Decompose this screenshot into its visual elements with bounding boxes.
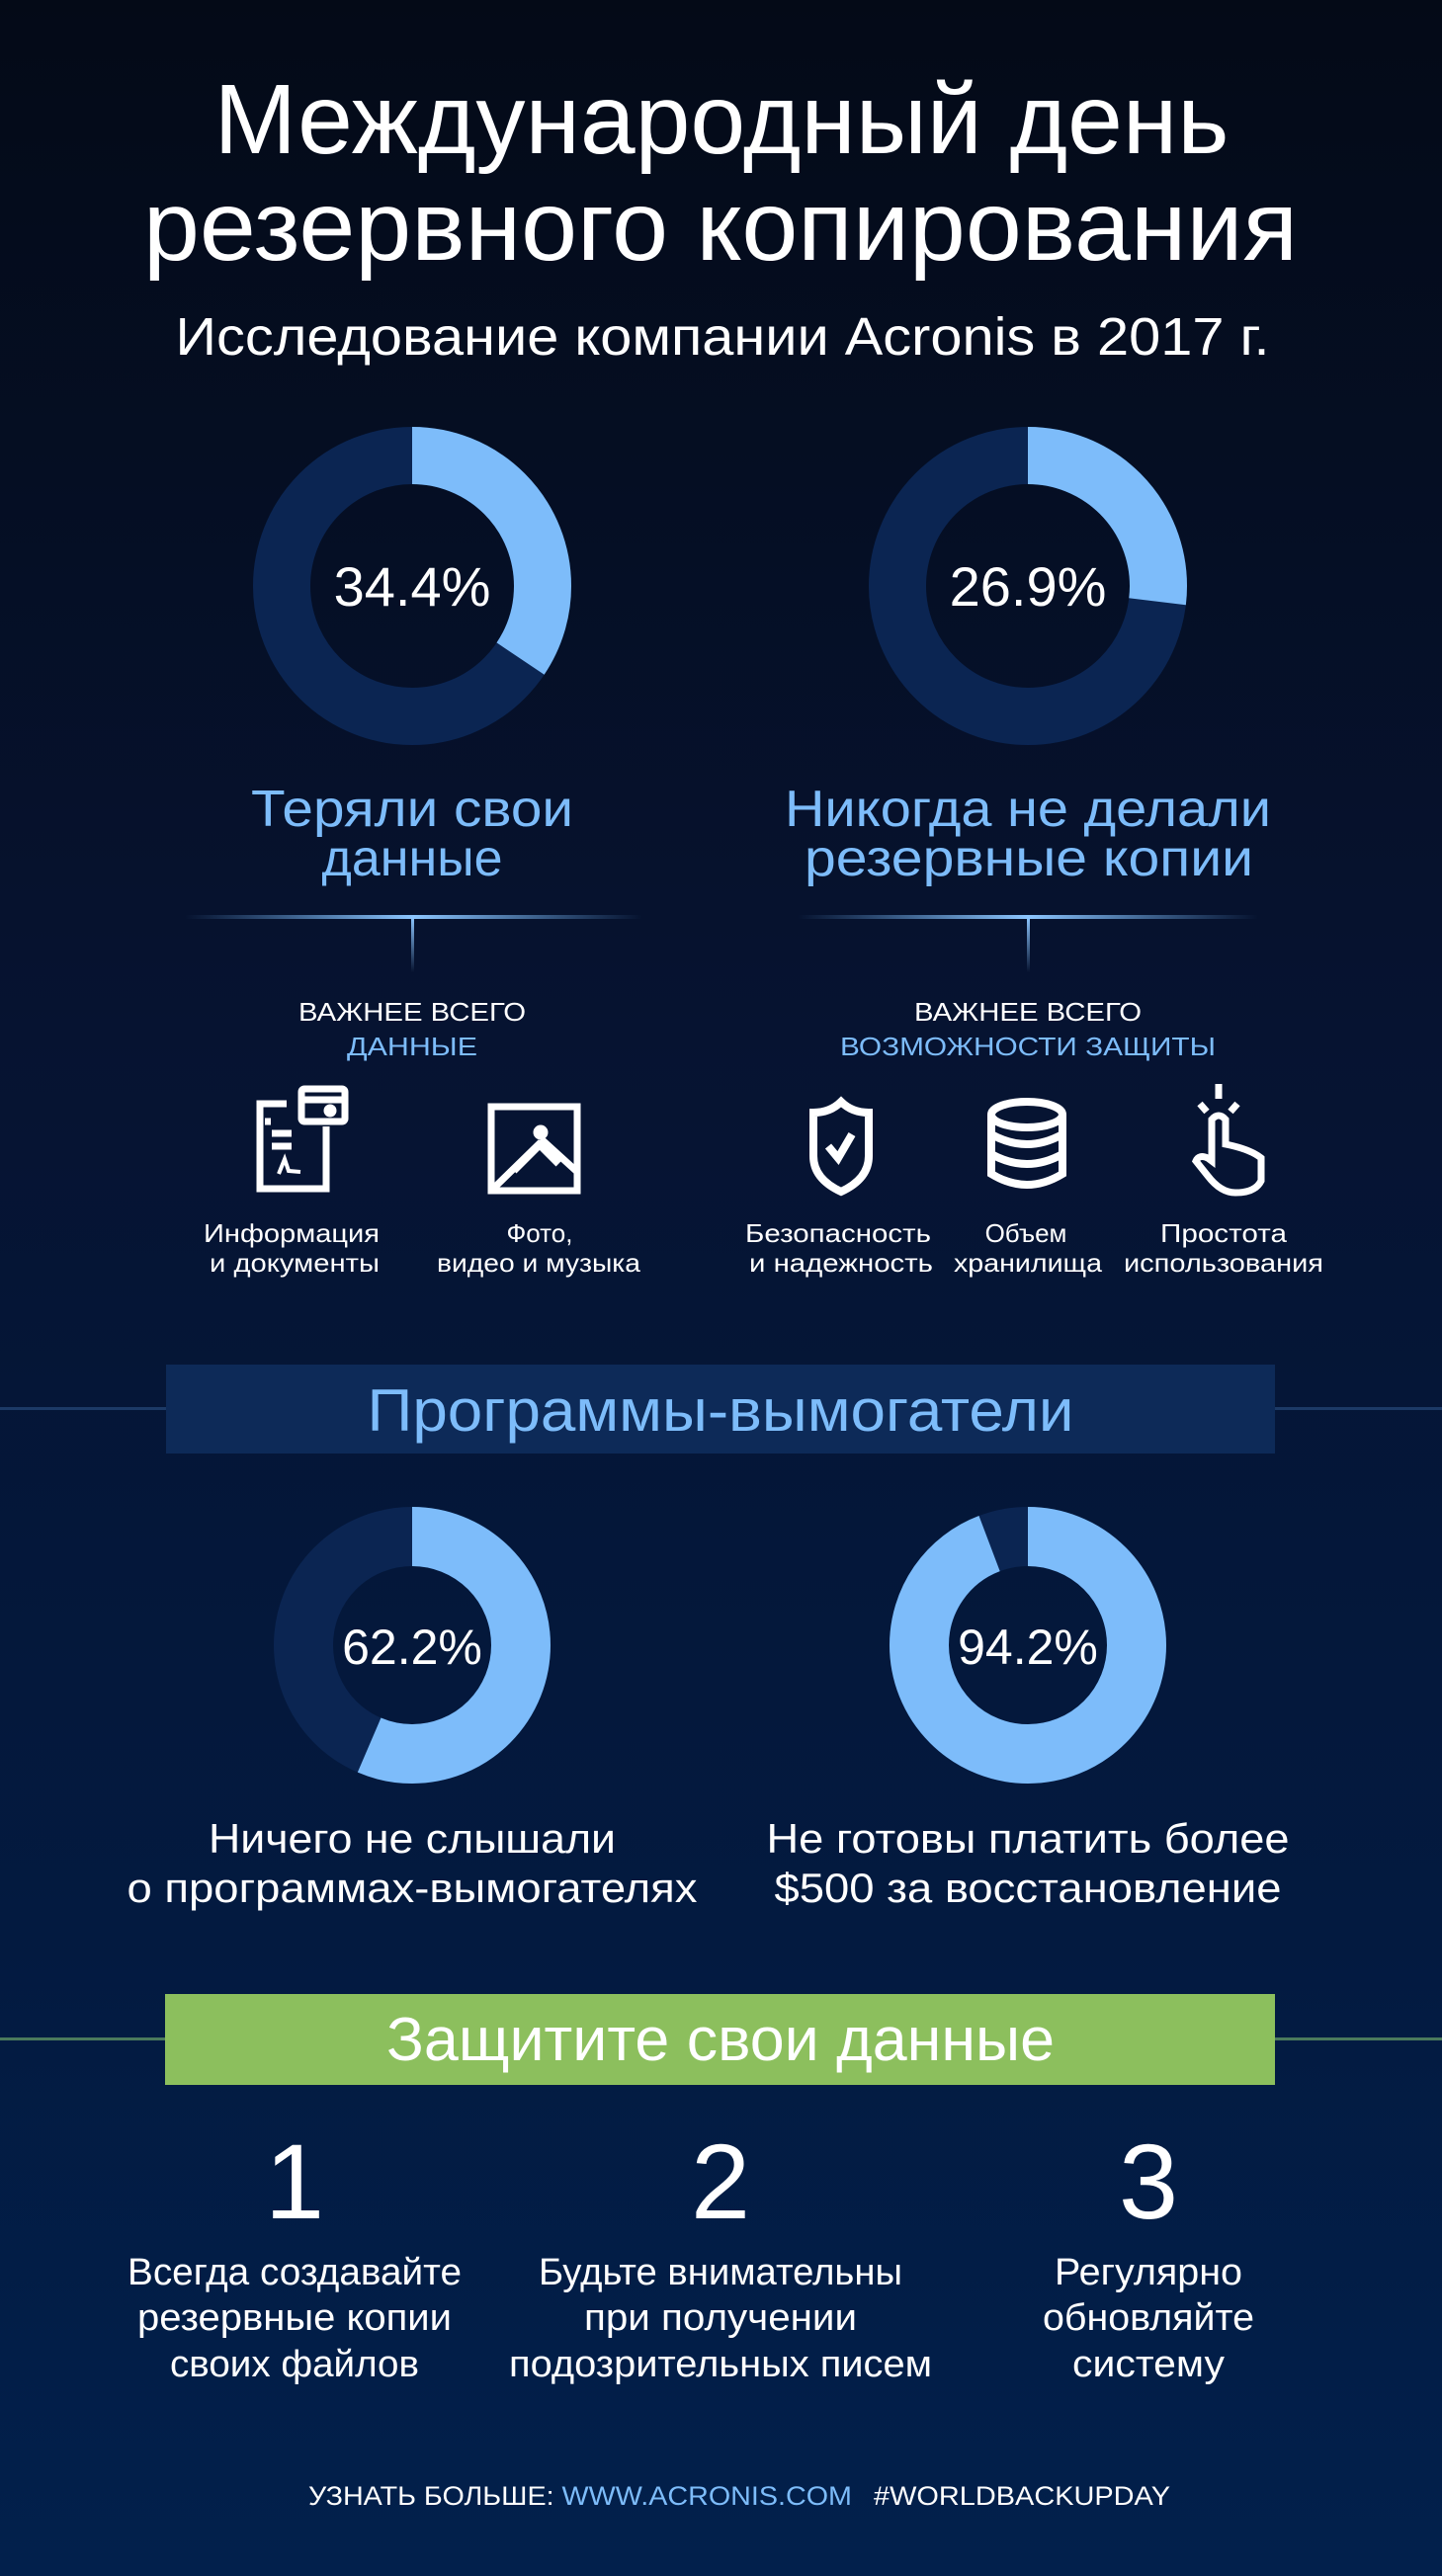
icon: documents: [260, 1089, 345, 1189]
step 2: при получении: [584, 2297, 857, 2339]
subtitle: Исследование компании Acronis в 2017 г.: [176, 307, 1269, 367]
donut: 62.2%: 62.2%: [342, 1620, 482, 1675]
icon: touch hand: [1196, 1084, 1261, 1193]
icon labels: [204, 1218, 1323, 1278]
step 1: резервные копии: [137, 2297, 452, 2339]
step 2: [509, 2121, 932, 2385]
icon labels: Информация: [204, 1218, 380, 1248]
icon: photo: [491, 1107, 577, 1191]
label: not ready to pay: [767, 1815, 1289, 1911]
heading: most important data: ВАЖНЕЕ ВСЕГО: [298, 997, 526, 1027]
icon labels: Безопасность: [745, 1218, 931, 1248]
donut: 34.4% lost data: [282, 456, 543, 716]
label: lost data: [251, 781, 573, 887]
donut: 62.2%: [303, 1537, 521, 1754]
step 3: систему: [1072, 2344, 1225, 2385]
icon labels: и надежность: [749, 1248, 933, 1278]
step 3: Регулярно: [1055, 2252, 1242, 2293]
heading: most important protection: ВАЖНЕЕ ВСЕГО: [914, 997, 1142, 1027]
donut: 34.4% lost data: 34.4%: [334, 555, 490, 618]
label: never heard: [127, 1815, 698, 1911]
title: Международный день: [213, 64, 1230, 175]
icon labels: Объем: [985, 1218, 1066, 1248]
label: lost data: Теряли свои: [251, 781, 573, 838]
label: never heard: о программах-вымогателях: [127, 1865, 698, 1911]
heading: most important data: ДАННЫЕ: [347, 1032, 477, 1061]
icon labels: Фото,: [507, 1218, 572, 1248]
banner: protect your data: Защитите свои данные: [386, 2006, 1055, 2074]
banner: protect your data: [165, 1994, 1275, 2085]
footer: УЗНАТЬ БОЛЬШЕ: WWW.ACRONIS.COM: [308, 2481, 852, 2511]
banner: ransomware: [166, 1365, 1275, 1454]
step 3: обновляйте: [1043, 2297, 1254, 2339]
step 1: 1: [265, 2121, 324, 2241]
heading: most important protection: ВОЗМОЖНОСТИ ЗАЩИТЫ: [840, 1032, 1216, 1061]
donut: 26.9% never backed up: 26.9%: [950, 555, 1106, 618]
heading: most important protection: [840, 997, 1216, 1061]
icon labels: и документы: [210, 1248, 380, 1278]
donut: 26.9% never backed up: [897, 456, 1158, 716]
title: [143, 64, 1298, 282]
banner: ransomware: Программы-вымогатели: [368, 1377, 1073, 1444]
icon labels: использования: [1124, 1248, 1323, 1278]
step 1: [127, 2121, 462, 2385]
footer: #WORLDBACKUPDAY: [874, 2481, 1170, 2511]
icon labels: хранилища: [954, 1248, 1103, 1278]
label: never backed up: резервные копии: [805, 830, 1253, 887]
connector left: [185, 915, 642, 972]
label: never backed up: [785, 781, 1271, 887]
label: not ready to pay: Не готовы платить более: [767, 1815, 1289, 1862]
icon: shield: [813, 1102, 869, 1192]
icon: database: [991, 1102, 1062, 1185]
title: резервного копирования: [143, 171, 1298, 282]
icon labels: видео и музыка: [437, 1248, 641, 1278]
label: lost data: данные: [322, 830, 502, 887]
label: never backed up: Никогда не делали: [785, 781, 1271, 838]
step 1: своих файлов: [170, 2344, 419, 2385]
step 2: 2: [691, 2121, 750, 2241]
connector right: [798, 915, 1258, 972]
donut: 94.2%: [919, 1537, 1137, 1754]
donut: 94.2%: 94.2%: [958, 1620, 1098, 1675]
heading: most important data: [298, 997, 526, 1061]
step 3: [1043, 2121, 1254, 2385]
label: not ready to pay: $500 за восстановление: [775, 1865, 1281, 1911]
step 2: Будьте внимательны: [539, 2252, 902, 2293]
step 2: подозрительных писем: [509, 2344, 932, 2385]
label: never heard: Ничего не слышали: [209, 1815, 616, 1862]
step 3: 3: [1119, 2121, 1178, 2241]
step 1: Всегда создавайте: [127, 2252, 462, 2293]
footer: [308, 2481, 1170, 2511]
icon labels: Простота: [1160, 1218, 1288, 1248]
